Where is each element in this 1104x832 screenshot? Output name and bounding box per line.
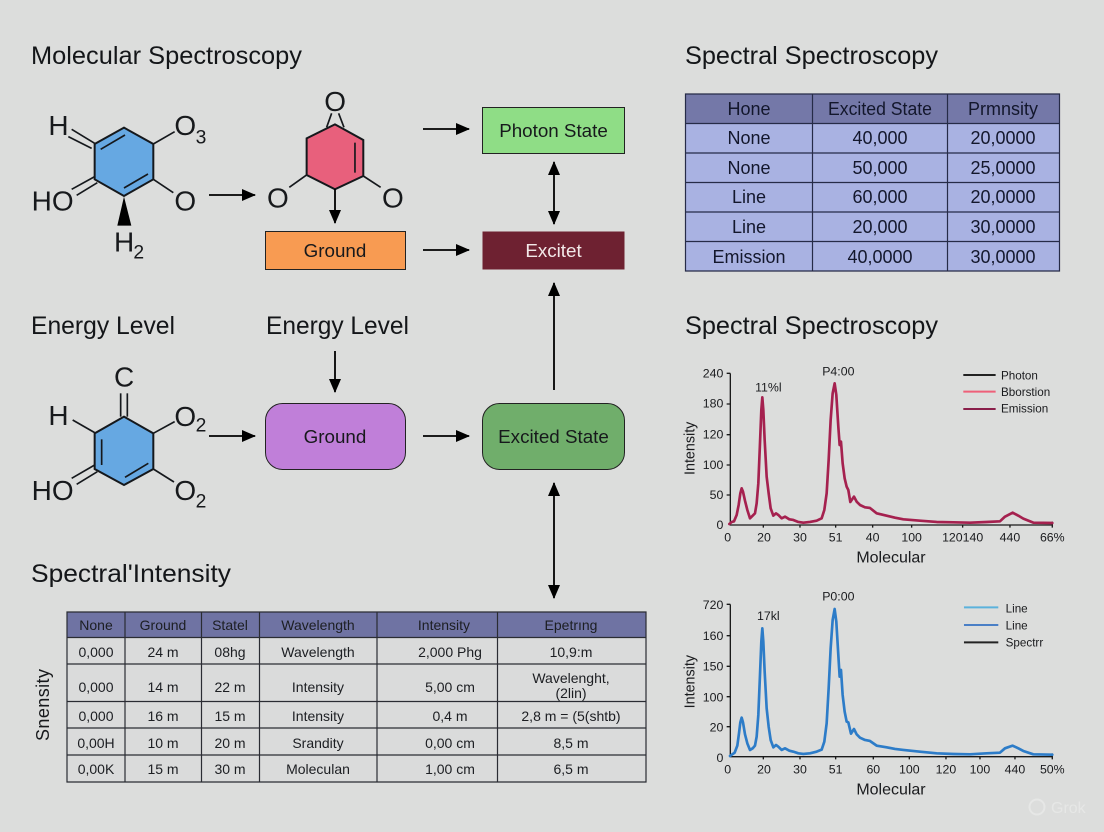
chart: line spectrum: 100 [970, 762, 990, 776]
box: ground orange: Ground [304, 240, 366, 261]
heading: spectral spectroscopy table: Spectral Spectroscopy [685, 42, 939, 70]
chart: line spectrum: Line [1006, 619, 1028, 632]
table: spectral intensity: Statel [212, 617, 248, 633]
molecule: blue ring top: H [48, 110, 69, 141]
table: spectral intensity: 0,4 m [432, 708, 468, 724]
table: spectral spectroscopy: Excited State [828, 99, 932, 119]
table: spectral intensity: 5,00 cm [425, 679, 475, 695]
arrow: to photon state [423, 128, 469, 130]
molecule: blue ring top: HO [32, 186, 74, 217]
table: spectral intensity: 24 m [147, 644, 179, 660]
arrow: excited state up to excited [553, 283, 555, 390]
chart: emission spectrum: Bborstion [1001, 386, 1050, 399]
curve: blue line [730, 609, 1052, 756]
table: spectral spectroscopy: 20,0000 [970, 128, 1036, 148]
chart: line spectrum: Line [1006, 602, 1028, 615]
chart: line spectrum: Spectrr [1006, 637, 1043, 650]
table: spectral intensity: 08hg [214, 644, 246, 660]
box: ground orange [266, 232, 406, 270]
chart: emission spectrum: Intensity [682, 421, 698, 475]
table: spectral intensity: None [79, 617, 113, 633]
chart: line spectrum: Intensity [682, 654, 698, 708]
chart: emission spectrum: 66% [1040, 531, 1065, 545]
table: spectral intensity: 0,000 [78, 679, 114, 695]
heading: energy level left: Energy Level [31, 312, 175, 340]
chart: emission spectrum: 100 [901, 531, 922, 545]
table: spectral intensity [67, 612, 646, 782]
chart: line spectrum [682, 590, 1065, 798]
table: spectral spectroscopy: Line [732, 187, 766, 207]
molecule: blue ring top: 2 [133, 242, 144, 263]
arrow: blue molecule to red molecule [209, 194, 255, 196]
box: excited dark [482, 232, 624, 270]
molecule: blue ring top: O [174, 110, 196, 141]
table: spectral intensity: 0,000 [78, 644, 114, 660]
molecule: blue ring lower: 2 [196, 416, 206, 437]
box: ground purple: Ground [304, 426, 366, 447]
arrow: photon state and excited double [553, 162, 555, 224]
table: spectral intensity: 2,000 Phg [418, 644, 482, 660]
heading: energy level centre: Energy Level [266, 312, 409, 340]
table: spectral intensity: 10,9:m [550, 644, 592, 660]
chart: emission spectrum: 0 [724, 531, 731, 545]
chart: line spectrum: 30 [793, 762, 807, 776]
arrow: red molecule to ground [334, 189, 336, 223]
table: spectral intensity: Moleculan [286, 761, 350, 777]
molecule: blue ring top: 3 [196, 127, 206, 148]
table: spectral intensity: 16 m [147, 708, 179, 724]
table: spectral intensity: Wavelength [281, 644, 355, 660]
chart: emission spectrum: 30 [793, 531, 807, 545]
heading: spectral spectroscopy chart: Spectral Spectroscopy [685, 312, 939, 340]
table: spectral spectroscopy: Prmnsity [968, 99, 1038, 119]
chart: line spectrum: 720 [703, 598, 723, 612]
chart: line spectrum: 160 [703, 629, 723, 643]
table: spectral intensity: 15 m [147, 761, 179, 777]
heading: spectral intensity: Spectral'Intensity [31, 560, 232, 588]
table: spectral intensity: (2lin) [555, 685, 587, 701]
table: spectral spectroscopy: 30,0000 [970, 247, 1036, 267]
chart: line spectrum: 50% [1040, 762, 1065, 776]
chart: line spectrum: 100 [899, 762, 920, 776]
chart: emission spectrum: 40 [866, 531, 880, 545]
chart: line spectrum: 120 [936, 762, 956, 776]
chart: emission spectrum: Photon [1001, 369, 1038, 382]
arrow: ground to excited state [423, 435, 469, 437]
arrow: ground to excited [423, 249, 469, 251]
molecule: blue ring top: H [114, 227, 134, 258]
arrow: excited state to table double [553, 483, 555, 598]
box: excited dark: Excitet [525, 240, 582, 261]
molecule: blue ring lower: H [48, 400, 69, 431]
chart: line spectrum: 20 [757, 762, 771, 776]
box: excited state green [482, 404, 624, 470]
chart: emission spectrum: Molecular [856, 550, 926, 567]
table: spectral spectroscopy: 40,0000 [847, 247, 913, 267]
heading: molecular spectroscopy: Molecular Spectroscopy [31, 42, 302, 70]
chart: emission spectrum: 240 [703, 367, 723, 381]
table: spectral intensity: 0,00K [78, 761, 115, 777]
arrow: energy level to ground [334, 351, 336, 392]
box: photon state [482, 108, 624, 154]
chart: emission spectrum: 51 [829, 531, 843, 545]
chart: emission spectrum: 120140 [942, 531, 983, 545]
table: spectral spectroscopy: Emission [712, 247, 786, 267]
molecule: blue ring top [32, 110, 206, 263]
chart: line spectrum: 51 [829, 762, 843, 776]
molecule: blue ring top: O [174, 186, 196, 217]
box: photon state: Photon State [499, 120, 608, 141]
molecule: red ring top: O [382, 182, 404, 213]
chart: emission spectrum: 100 [703, 458, 723, 472]
table: spectral intensity: 14 m [147, 679, 179, 695]
table: spectral spectroscopy: 20,000 [852, 217, 908, 237]
table: spectral spectroscopy: 40,000 [852, 128, 908, 148]
chart: line spectrum: 150 [703, 660, 723, 674]
table: spectral spectroscopy: 50,000 [852, 158, 908, 178]
table: spectral spectroscopy: None [727, 128, 771, 148]
chart: line spectrum: 0 [724, 762, 731, 776]
table: spectral intensity: 0,00 cm [425, 735, 475, 751]
table: spectral spectroscopy [686, 94, 1060, 271]
arrow: lower molecule to ground [209, 435, 255, 437]
table: spectral spectroscopy: 20,0000 [970, 187, 1036, 207]
chart: emission spectrum: 11%l [755, 380, 782, 394]
table: spectral intensity: Wavelength [281, 617, 355, 633]
table: spectral intensity: 8,5 m [553, 735, 589, 751]
chart: emission spectrum: 120 [703, 427, 723, 441]
box: excited state green: Excited State [498, 426, 609, 447]
chart: emission spectrum: Emission [1001, 403, 1048, 416]
table: spectral intensity: Intensity [292, 679, 344, 695]
table: spectral intensity: 2,8 m = (5(shtb) [521, 708, 621, 724]
molecule: blue ring lower: O [174, 475, 196, 506]
chart: line spectrum: 60 [866, 762, 880, 776]
table: spectral intensity: 15 m [214, 708, 246, 724]
chart: line spectrum: 20 [710, 720, 723, 734]
table: spectral intensity: Intensity [292, 708, 344, 724]
molecule: red ring top: O [267, 182, 289, 213]
curve: emission line [729, 383, 1052, 524]
chart: line spectrum: 0 [716, 751, 723, 765]
table: spectral intensity: Intensity [418, 617, 470, 633]
table: spectral intensity: Wavelenght, [532, 670, 610, 686]
watermark: grok [1030, 800, 1087, 817]
chart: line spectrum: Molecular [856, 781, 926, 798]
table: spectral spectroscopy: Line [732, 217, 766, 237]
table: spectral intensity: 30 m [214, 761, 246, 777]
chart: emission spectrum [682, 365, 1065, 567]
table: spectral intensity: Srandity [292, 735, 344, 751]
table: spectral intensity: 1,00 cm [425, 761, 475, 777]
table: spectral intensity: 6,5 m [553, 761, 589, 777]
molecule: blue ring lower: HO [32, 475, 74, 506]
table: spectral spectroscopy: None [727, 158, 771, 178]
box: ground purple [266, 404, 406, 470]
chart: emission spectrum: P4:00 [822, 365, 855, 379]
chart: line spectrum: 17kl [757, 609, 780, 623]
table: spectral spectroscopy: 30,0000 [970, 217, 1036, 237]
molecule: red ring top [267, 86, 404, 213]
axis label: snensity: Snensity [33, 669, 53, 741]
table: spectral intensity: Epetrıng [545, 617, 597, 633]
table: spectral intensity: 20 m [214, 735, 246, 751]
molecule: blue ring lower: 2 [196, 491, 206, 512]
chart: emission spectrum: 440 [1000, 531, 1020, 545]
molecule: red ring top: O [324, 86, 346, 117]
chart: line spectrum: P0:00 [822, 590, 855, 604]
watermark: grok: Grok [1051, 800, 1087, 817]
molecule: blue ring lower: O [174, 401, 196, 432]
chart: emission spectrum: 20 [757, 531, 771, 545]
chart: emission spectrum: 0 [716, 518, 723, 532]
table: spectral intensity: Ground [140, 617, 186, 633]
table: spectral intensity: 22 m [214, 679, 246, 695]
table: spectral intensity: 10 m [147, 735, 179, 751]
table: spectral spectroscopy: 60,000 [852, 187, 908, 207]
chart: emission spectrum: 180 [703, 397, 723, 411]
table: spectral spectroscopy: 25,0000 [970, 158, 1036, 178]
molecule: blue ring lower [32, 362, 206, 512]
chart: emission spectrum: 50 [710, 488, 723, 502]
table: spectral spectroscopy: Hone [727, 99, 771, 119]
table: spectral intensity: 0,00H [77, 735, 115, 751]
chart: line spectrum: 100 [703, 690, 723, 704]
chart: line spectrum: 440 [1005, 762, 1025, 776]
molecule: blue ring lower: C [114, 362, 134, 393]
table: spectral intensity: 0,000 [78, 708, 114, 724]
